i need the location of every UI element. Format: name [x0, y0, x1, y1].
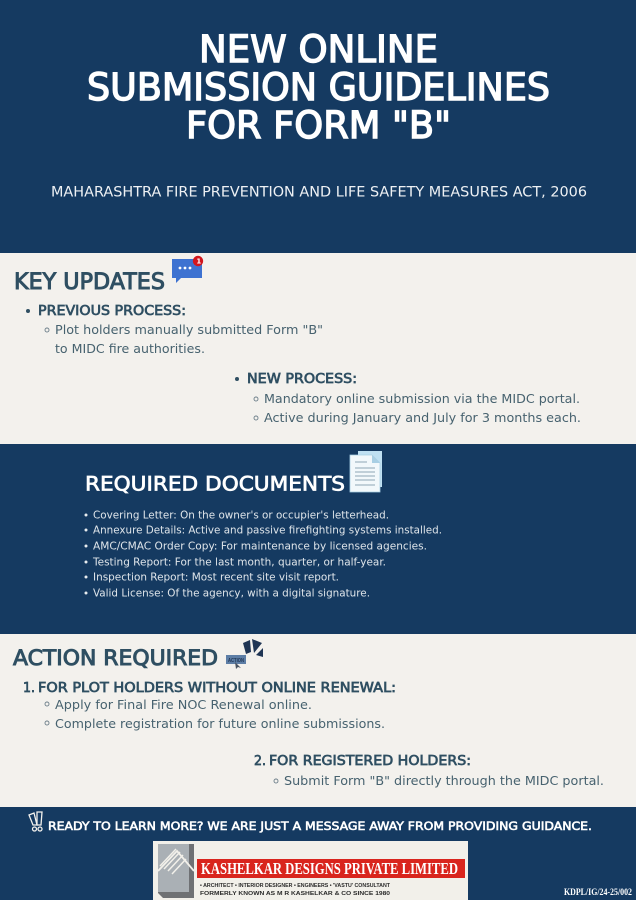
list: documents: Valid License: Of the agency, with a digital signature.	[93, 588, 370, 600]
company name band: KASHELKAR DESIGNS PRIVATE LIMITED	[201, 859, 458, 878]
panel: header	[0, 0, 636, 253]
list: documents: Inspection Report: Most recent site visit report.	[93, 572, 339, 584]
title: SUBMISSION GUIDELINES	[87, 65, 550, 109]
heading: required documents: REQUIRED DOCUMENTS	[85, 472, 345, 496]
block: previous process: to MIDC fire authorities.	[55, 341, 205, 356]
block: plot holders	[23, 680, 396, 731]
icon: chat notification: 1	[196, 257, 201, 265]
icon: exclamation marks	[29, 812, 42, 831]
block: plot holders: 1.	[23, 680, 35, 696]
icon: action cursor	[226, 639, 263, 669]
list: documents	[84, 510, 442, 600]
list: documents: Covering Letter: On the owner's or occupier's letterhead.	[93, 510, 389, 522]
block: registered holders: 2.	[254, 753, 266, 769]
company tagline: FORMERLY KNOWN AS M R KASHELKAR & CO SINCE 1980	[200, 891, 390, 897]
company tagline: • ARCHITECT • INTERIOR DESIGNER • ENGINEERS • 'VASTU' CONSULTANT	[200, 883, 391, 889]
block: new process: NEW PROCESS:	[247, 371, 357, 387]
title: FOR FORM "B"	[186, 103, 451, 147]
icon: chat notification	[172, 256, 203, 283]
title: NEW ONLINE	[199, 27, 438, 71]
block: registered holders: Submit Form "B" directly through the MIDC portal.	[284, 773, 604, 788]
icon: action cursor: ACTION	[228, 658, 244, 664]
panel: footer	[0, 807, 636, 900]
block: new process	[235, 371, 581, 425]
block: previous process	[26, 303, 323, 356]
block: registered holders	[254, 753, 604, 788]
logo mark: house	[158, 844, 194, 898]
heading: action required: ACTION REQUIRED	[13, 646, 218, 671]
block: previous process: PREVIOUS PROCESS:	[38, 303, 186, 319]
logo: Kashelkar Designs	[153, 841, 468, 900]
title	[87, 27, 550, 147]
panel: required documents	[0, 444, 636, 634]
list: documents: AMC/CMAC Order Copy: For maintenance by licensed agencies.	[93, 540, 427, 552]
block: new process: Active during January and July for 3 months each.	[264, 410, 581, 425]
panel: action required	[0, 634, 636, 807]
block: registered holders: FOR REGISTERED HOLDERS:	[269, 753, 471, 769]
block: plot holders: Complete registration for future online submissions.	[55, 716, 385, 731]
company tagline	[200, 883, 391, 897]
block: plot holders: Apply for Final Fire NOC Renewal online.	[55, 697, 312, 712]
call to action: READY TO LEARN MORE? WE ARE JUST A MESSAGE AWAY FROM PROVIDING GUIDANCE.	[48, 819, 592, 833]
subtitle: MAHARASHTRA FIRE PREVENTION AND LIFE SAFETY MEASURES ACT, 2006	[51, 184, 587, 200]
list: documents: Annexure Details: Active and passive firefighting systems installed.	[93, 524, 442, 536]
list: documents: Testing Report: For the last month, quarter, or half-year.	[92, 556, 386, 568]
panel: key updates	[0, 253, 636, 444]
block: plot holders: FOR PLOT HOLDERS WITHOUT ONLINE RENEWAL:	[38, 680, 396, 696]
block: new process: Mandatory online submission via the MIDC portal.	[264, 391, 580, 406]
heading: key updates: KEY UPDATES	[14, 269, 165, 295]
icon: documents	[350, 451, 382, 492]
block: previous process: Plot holders manually submitted Form "B"	[55, 322, 323, 337]
